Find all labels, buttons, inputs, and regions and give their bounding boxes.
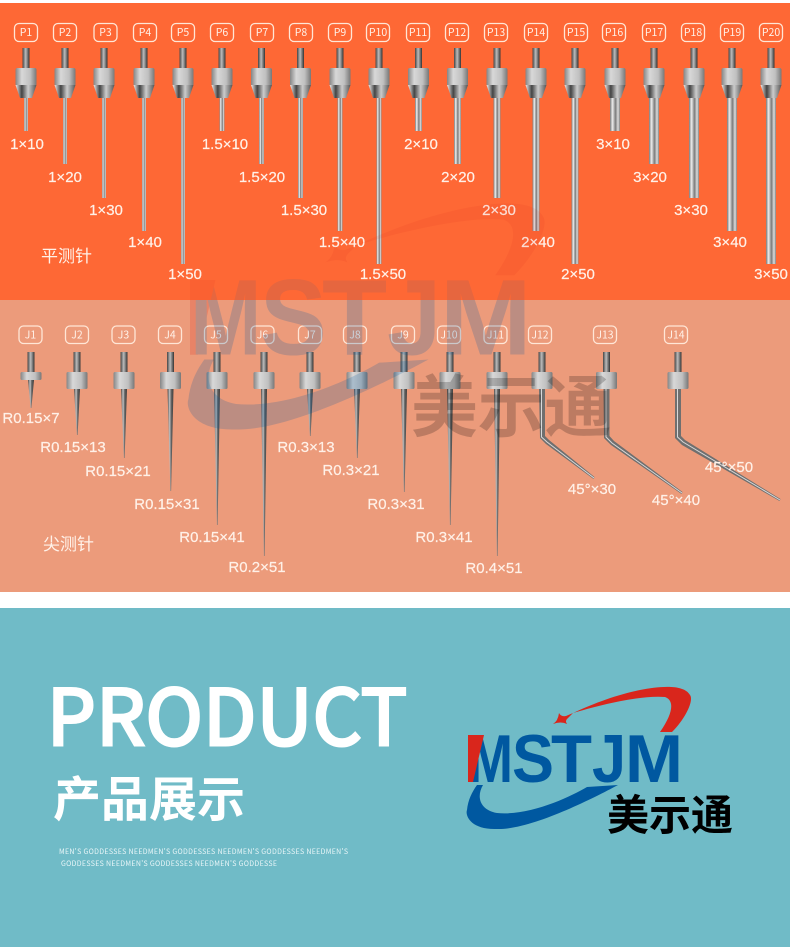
probe J9: J9	[397, 328, 409, 342]
logo Chinese name: 美示通	[607, 782, 733, 843]
logo red star	[553, 713, 573, 724]
probe J5: J5	[210, 328, 222, 342]
logo letters	[468, 721, 683, 797]
logo letters: T	[551, 721, 592, 797]
probe J12: J12	[531, 328, 549, 342]
watermark logo on flat probes panel: S	[260, 257, 327, 378]
logo: MSTJM	[467, 687, 733, 843]
probe P12	[441, 24, 475, 186]
watermark logo on flat probes panel	[210, 204, 540, 300]
probe J14: J14	[667, 328, 685, 342]
probe P12: 2×20	[441, 169, 475, 186]
watermark logo on flat probes panel: 美示通	[411, 355, 611, 451]
probe J14	[664, 326, 780, 501]
probe P13: 2×30	[482, 202, 516, 219]
probe J14: 45°×50	[705, 459, 753, 476]
probe P17: P17	[645, 25, 663, 40]
probe P11: 2×10	[404, 136, 438, 153]
probe P8: 1.5×30	[281, 202, 327, 219]
probe P2: 1×20	[48, 169, 82, 186]
title: PRODUCT: PRODUCT	[47, 657, 407, 768]
probe P18: P18	[684, 25, 702, 40]
probe P18	[674, 24, 708, 219]
probe P15	[561, 24, 595, 283]
probe P3	[89, 24, 123, 219]
probe P9: P9	[334, 25, 346, 40]
probe J7	[277, 326, 335, 456]
probe P11	[404, 24, 438, 153]
probe J1: R0.15×7	[2, 410, 60, 427]
watermark logo on pointed probes panel: M	[440, 257, 532, 378]
probe P15: 2×50	[561, 266, 595, 283]
probe P12: P12	[448, 25, 466, 40]
logo red M stroke	[468, 735, 484, 782]
logo blue swoosh	[467, 785, 618, 829]
probe J5	[179, 326, 245, 546]
watermark logo on pointed probes panel: 美示通	[411, 355, 611, 451]
probe J10: R0.3×41	[415, 529, 473, 546]
probe J10: J10	[440, 328, 458, 342]
probe J4	[134, 326, 200, 513]
probe J8: J8	[349, 328, 361, 342]
probe J12: 45°×30	[568, 481, 616, 498]
probe J10	[415, 326, 473, 546]
probe J12	[528, 326, 616, 498]
probe P14: P14	[527, 25, 545, 40]
probe P17: 3×20	[633, 169, 667, 186]
logo letters: S	[512, 721, 554, 797]
probe P1: P1	[20, 25, 32, 40]
watermark logo on flat probes panel: J	[387, 257, 441, 378]
probe P10: 1.5×50	[360, 266, 406, 283]
probe P9	[319, 24, 365, 251]
watermark logo on pointed probes panel: M	[190, 257, 262, 378]
probe J1: J1	[25, 328, 36, 342]
probe P7: P7	[256, 25, 268, 40]
probe P13: P13	[487, 25, 505, 40]
probe P6: P6	[216, 25, 228, 40]
probe J3: R0.15×21	[85, 463, 151, 480]
small caption text: GODDESSES NEEDMEN'S GODDESSES NEEDMEN'S GODDESSE	[61, 859, 277, 869]
probe J6: R0.2×51	[228, 559, 286, 576]
heading: pointed probes: 尖测针	[43, 530, 94, 555]
probe P10: P10	[369, 25, 387, 40]
probe P8	[281, 24, 327, 219]
probe P20: P20	[762, 25, 780, 40]
probe J13	[594, 326, 700, 509]
panel: flat probes background	[0, 3, 790, 300]
probe P4: 1×40	[128, 234, 162, 251]
probe J9: R0.3×31	[367, 496, 425, 513]
probe J6	[228, 326, 286, 576]
probe J11: J11	[487, 328, 504, 342]
probe P3: P3	[99, 25, 112, 40]
small caption text: MEN'S GODDESSES NEEDMEN'S GODDESSES NEEDMEN'S GODDESSES NEEDMEN'S	[59, 847, 348, 857]
probe P20: 3×50	[754, 266, 788, 283]
probe P8: P8	[295, 25, 307, 40]
probe P18: 3×30	[674, 202, 708, 219]
probe P4: P4	[139, 25, 151, 40]
probe J5: R0.15×41	[179, 529, 245, 546]
probe J7: J7	[304, 328, 316, 342]
probe J2: R0.15×13	[40, 439, 106, 456]
probe P10	[360, 24, 406, 283]
probe P1: 1×10	[10, 136, 44, 153]
probe P20	[754, 24, 788, 283]
probe P5: P5	[177, 25, 189, 40]
probe J11: R0.4×51	[465, 560, 523, 577]
logo letters: M	[468, 721, 513, 797]
probe J7: R0.3×13	[277, 439, 335, 456]
probe J9	[367, 326, 425, 513]
probe P16: P16	[605, 25, 623, 40]
probe J4: R0.15×31	[134, 496, 200, 513]
probe P6	[202, 24, 248, 153]
logo red swoosh	[573, 687, 691, 732]
probe J2	[40, 326, 106, 456]
probe P19: 3×40	[713, 234, 747, 251]
probe J1	[2, 326, 60, 427]
probe P9: 1.5×40	[319, 234, 365, 251]
small caption text	[59, 847, 348, 869]
probe P2: P2	[59, 25, 71, 40]
logo letters: M	[625, 721, 683, 797]
probe P16: 3×10	[596, 136, 630, 153]
probe P7: 1.5×20	[239, 169, 285, 186]
probe J13: J13	[596, 328, 614, 342]
probe J2: J2	[71, 328, 83, 342]
probe P15: P15	[567, 25, 585, 40]
probe J4: J4	[164, 328, 176, 342]
probe P3: 1×30	[89, 202, 123, 219]
probe P7	[239, 24, 285, 186]
probe J3	[85, 326, 151, 480]
probe J11	[465, 326, 523, 577]
probe P19	[713, 24, 747, 251]
watermark logo on pointed probes panel: T	[322, 257, 387, 378]
probe P1	[10, 24, 44, 153]
logo letters: J	[592, 721, 626, 797]
watermark logo on flat probes panel: T	[322, 257, 387, 378]
probe P5	[168, 24, 202, 283]
heading: flat probes: 平测针	[41, 242, 92, 267]
probe P4	[128, 24, 162, 251]
watermark logo on flat probes panel: M	[440, 257, 532, 378]
probe J13: 45°×40	[652, 492, 700, 509]
probe P17	[633, 24, 667, 186]
panel: product banner background	[0, 608, 790, 947]
probe P11: P11	[409, 25, 427, 40]
subtitle: product showcase: 产品展示	[53, 760, 245, 830]
probe J8: R0.3×21	[322, 462, 380, 479]
probe P14: 2×40	[521, 234, 555, 251]
probe J3: J3	[118, 328, 129, 342]
probe P14	[521, 24, 555, 251]
watermark logo on pointed probes panel: S	[260, 257, 327, 378]
watermark logo on pointed probes panel: J	[387, 257, 441, 378]
probe P6: 1.5×10	[202, 136, 248, 153]
watermark logo on flat probes panel: M	[190, 257, 262, 378]
probe P13	[482, 24, 516, 219]
probe P5: 1×50	[168, 266, 202, 283]
watermark logo on pointed probes panel	[188, 300, 610, 438]
probe P2	[48, 24, 82, 186]
probe P16	[596, 24, 630, 153]
probe J8	[322, 326, 380, 479]
panel: pointed probes background	[0, 300, 790, 592]
probe P19: P19	[723, 25, 741, 40]
probe J6: J6	[257, 328, 268, 342]
